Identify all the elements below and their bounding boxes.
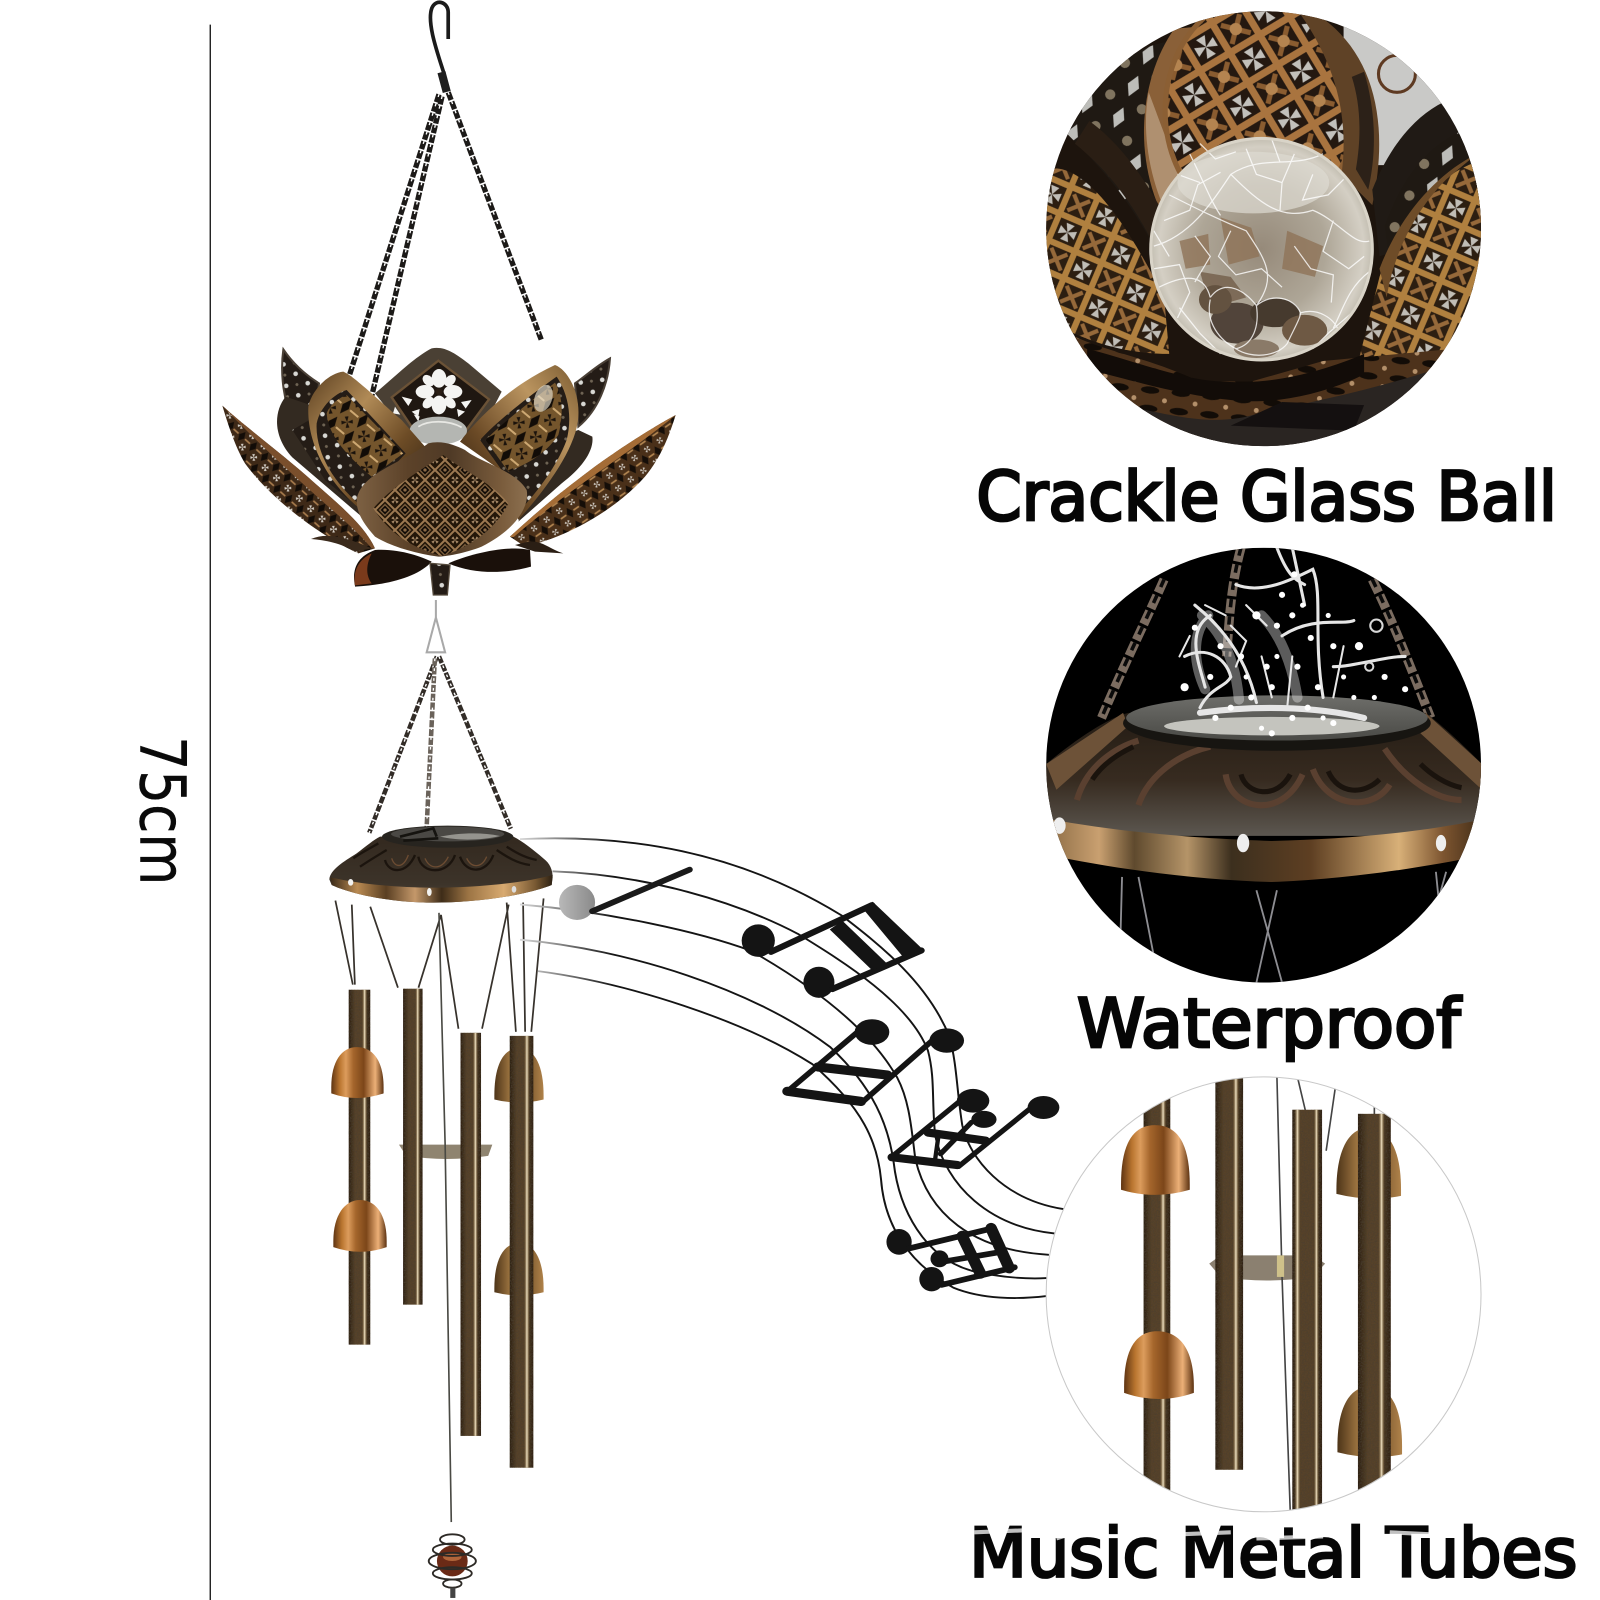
- gray backdrop: [1344, 26, 1468, 166]
- photo circle: lotus close-up: [1036, 0, 1497, 451]
- note group 4: [891, 1089, 1059, 1166]
- upper right petal: [460, 365, 578, 520]
- solar disc: [329, 826, 553, 903]
- plate: [1209, 1255, 1325, 1281]
- copper band: [331, 875, 553, 903]
- crackle glass ball: [1150, 137, 1373, 361]
- note group 3: [786, 1019, 964, 1103]
- panel: waterproof: [1046, 548, 1487, 1063]
- plate: [1123, 718, 1431, 751]
- hanging wires: [335, 898, 544, 1032]
- hook and upper chains: [349, 2, 542, 398]
- center string: [439, 913, 451, 1522]
- thin sepals: [311, 536, 372, 552]
- dark left band: [1075, 122, 1158, 236]
- rivets: [348, 879, 353, 886]
- dark sepals: [354, 550, 432, 587]
- staff lines: [520, 838, 1063, 1298]
- caption smudge: [974, 1530, 1431, 1538]
- outer left petal: [222, 406, 375, 553]
- tube 4: [1358, 1114, 1391, 1524]
- tube 3: [461, 1033, 481, 1436]
- tube 4: [510, 1036, 533, 1468]
- music notes and staff: [520, 838, 1063, 1298]
- scallops: [353, 843, 537, 870]
- caption: Crackle Glass Ball: Crackle Glass Ball: [976, 457, 1557, 536]
- tube 2: [403, 989, 423, 1305]
- hook ring: [1378, 55, 1415, 92]
- caption: Music Metal Tubes: Music Metal Tubes: [969, 1513, 1577, 1592]
- lotus lantern: [222, 348, 676, 595]
- scallops: [1077, 741, 1462, 805]
- dark bottom: [1087, 349, 1364, 401]
- top petal: [1164, 11, 1344, 174]
- lower chains: [369, 656, 511, 833]
- wires: [1276, 1078, 1376, 1510]
- photo circle: tubes close-up: [1121, 1078, 1402, 1510]
- body: [1046, 713, 1487, 836]
- solar panel top: [382, 826, 513, 848]
- note 1: [559, 870, 690, 920]
- tube 1 with bells: [331, 990, 387, 1345]
- small clip: [430, 563, 450, 595]
- dimension label: 75cm: 75cm: [126, 736, 200, 885]
- left silver petal: [1068, 45, 1156, 201]
- lower copper band: [1074, 336, 1444, 440]
- upper right dark petal: [1372, 103, 1481, 220]
- outer right petal: [510, 415, 676, 547]
- right band: [1301, 14, 1379, 205]
- center striker plate: [399, 1145, 492, 1159]
- note group 2: [742, 902, 923, 998]
- product: wind chime with lotus: [222, 2, 676, 1598]
- upper left petal: [308, 372, 425, 510]
- circle outline: [1046, 1077, 1481, 1512]
- back bells: [494, 1048, 544, 1295]
- outer left band: [1144, 27, 1192, 204]
- panel: music metal tubes: [969, 1077, 1577, 1592]
- wires below: [1120, 872, 1446, 983]
- right copper petal: [1360, 164, 1481, 359]
- far back petals: [282, 349, 319, 427]
- rivets: [1053, 817, 1446, 852]
- tube 1 and bells: [1121, 1097, 1194, 1528]
- caption: Waterproof: Waterproof: [1077, 984, 1463, 1063]
- back bells: [1336, 1128, 1402, 1457]
- front petal: [357, 442, 527, 557]
- pendant ornament: [429, 1534, 476, 1598]
- water splash: [1179, 548, 1405, 718]
- tube 3: [1292, 1110, 1322, 1520]
- tube 2: [1215, 1077, 1243, 1470]
- note group 5: [886, 1228, 1015, 1291]
- left copper petal: [1036, 168, 1169, 354]
- connector loop: [427, 600, 445, 652]
- height dimension line: [209, 25, 211, 1600]
- photo circle: water on solar panel: [1046, 548, 1487, 983]
- panel: crackle glass ball: [976, 0, 1557, 536]
- copper band: [1046, 818, 1487, 882]
- back petal: [375, 348, 502, 440]
- chains: [1102, 579, 1164, 718]
- glass ball hint: [410, 417, 467, 445]
